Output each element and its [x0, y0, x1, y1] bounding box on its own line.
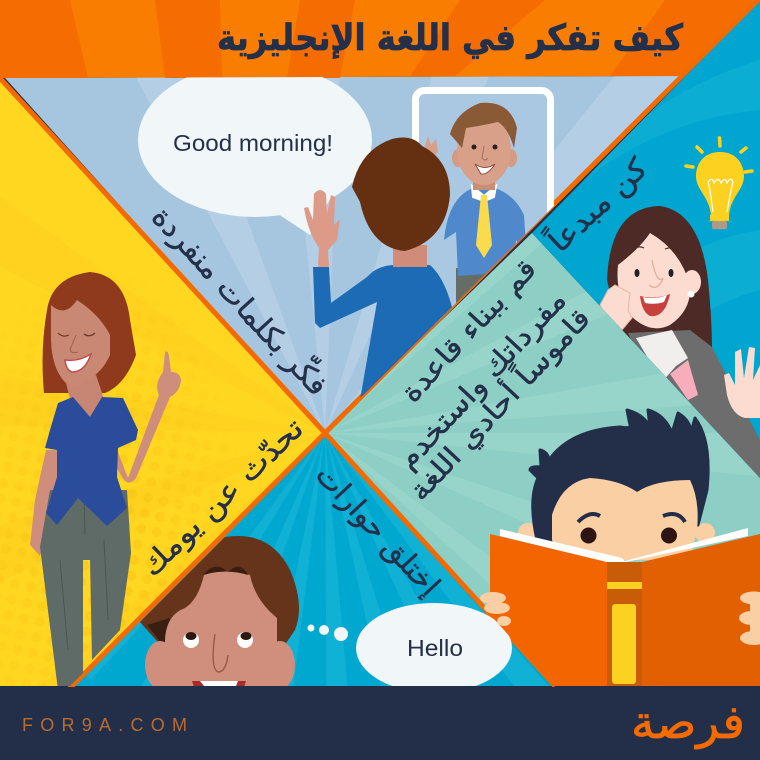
boy thinking (bottom panel)	[140, 536, 299, 690]
text: build vocabulary base	[390, 252, 597, 507]
website: FOR9A.COM	[22, 715, 187, 735]
thought dots	[308, 624, 348, 641]
speech bubble: Hello: Hello	[407, 635, 463, 661]
pages	[500, 528, 748, 562]
reflected man	[425, 102, 526, 303]
eyebrows	[578, 514, 685, 522]
eyes	[580, 528, 596, 544]
mirror scene	[416, 90, 550, 320]
neck	[66, 375, 104, 417]
hair	[352, 138, 450, 251]
left hand	[480, 592, 511, 626]
nose	[213, 634, 228, 672]
text: build vocabulary base: مفرداتك واستخدم	[390, 284, 573, 476]
blouse	[45, 397, 138, 526]
speech bubble: Good morning: Good morning!	[173, 130, 333, 156]
background panel: light blue wedge	[5, 76, 678, 430]
hair back	[607, 206, 712, 360]
text: be creative: كن مبدعاً	[539, 148, 654, 259]
background panel: teal wedge	[328, 233, 760, 606]
text: build vocabulary base: قم ببناء قاعدة	[394, 252, 543, 409]
mirror frame	[416, 90, 550, 320]
mouth	[192, 681, 246, 686]
face	[618, 233, 690, 328]
icon: light bulb	[686, 138, 752, 229]
face	[165, 572, 277, 690]
parting shadow	[203, 567, 248, 575]
book cover right	[642, 534, 760, 686]
woman pointing (yellow panel)	[30, 272, 181, 690]
neck	[393, 245, 427, 267]
background panel: right blue wedge	[530, 0, 760, 480]
text: build vocabulary base: قاموساً أحادي اللغة	[399, 299, 597, 507]
yellow label	[612, 604, 636, 684]
trousers	[40, 490, 131, 690]
text: talk about your day: تحدّث عن يومك	[134, 411, 310, 583]
spine	[607, 562, 642, 686]
ears	[518, 523, 538, 543]
smile	[640, 294, 670, 316]
cheek hand	[600, 285, 632, 330]
nose	[649, 260, 663, 287]
background panel: yellow wedge	[0, 82, 322, 686]
hair	[140, 536, 299, 652]
face	[552, 478, 698, 560]
yellow band	[607, 582, 642, 589]
right hand	[739, 592, 760, 645]
boy reading a book	[480, 410, 760, 686]
title: كيف تفكر في اللغة الإنجليزية	[217, 18, 683, 59]
background panel: bottom blue wedge	[76, 436, 552, 686]
text: make up conversations: إختلق حوارات	[308, 458, 447, 603]
pink blouse	[670, 360, 698, 400]
raised hand	[304, 190, 340, 267]
dark hair under fringe	[147, 618, 170, 642]
raised hand	[724, 347, 760, 418]
header band	[0, 0, 760, 78]
man seen from behind	[304, 138, 455, 420]
jacket	[628, 330, 760, 480]
speech bubble: Hello	[356, 603, 512, 693]
shirt	[313, 265, 452, 398]
speech bubble: Good morning	[138, 63, 372, 235]
eyes	[183, 632, 199, 648]
footer bar	[0, 687, 760, 760]
text: think in single words: فكّر بكلمات منفردة	[145, 198, 337, 402]
face	[51, 300, 110, 388]
ear and earring	[686, 270, 701, 294]
arms	[30, 450, 59, 556]
ears	[145, 641, 165, 686]
eyes and brows	[634, 269, 640, 277]
hair	[530, 410, 708, 540]
pointing hand	[157, 352, 181, 397]
back hair	[43, 272, 136, 393]
collar	[636, 330, 688, 382]
book cover left	[490, 534, 607, 686]
logo: فرصة	[631, 695, 745, 750]
woman touching cheek (right panel)	[600, 206, 760, 480]
